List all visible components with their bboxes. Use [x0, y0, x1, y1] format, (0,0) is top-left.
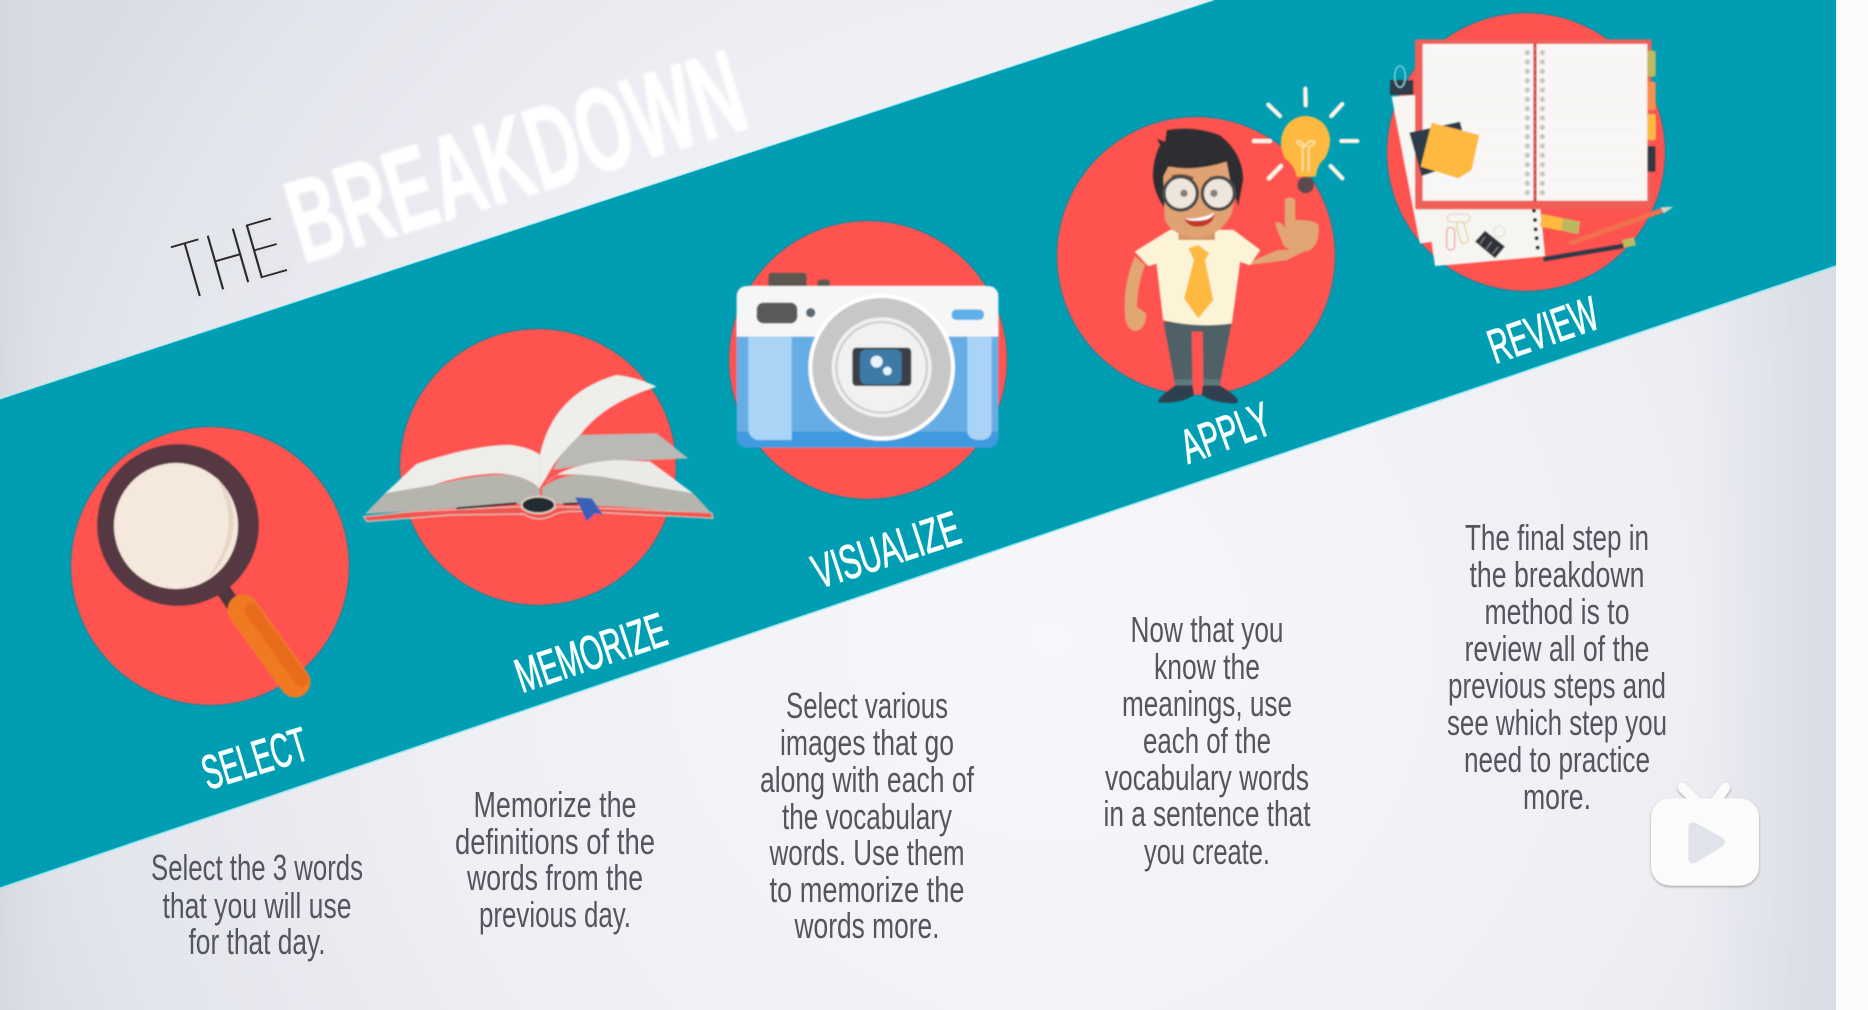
step description: review: previous steps and — [1448, 665, 1666, 706]
step description: apply: vocabulary words — [1105, 757, 1309, 798]
step: review — [1387, 13, 1673, 291]
step: visualize — [729, 221, 1007, 499]
step description: review: see which step you — [1447, 702, 1667, 743]
step description: visualize: to memorize the — [770, 869, 964, 910]
icon: video watermark logo — [1651, 788, 1759, 886]
step description: memorize: Memorize the — [474, 784, 636, 825]
step description: review: method is to — [1484, 591, 1630, 632]
step label: select: SELECT — [196, 718, 314, 801]
step description: visualize: Select various — [786, 685, 948, 726]
step description: review: the breakdown — [1470, 554, 1644, 595]
step label: apply: APPLY — [1174, 393, 1278, 474]
step: select — [71, 427, 349, 705]
step description: apply: know the — [1154, 646, 1260, 687]
step description: visualize — [760, 685, 975, 946]
step description: apply: meanings, use — [1122, 683, 1292, 724]
icon: man head and hand — [1153, 128, 1319, 252]
step description: review: The final step in — [1465, 517, 1649, 558]
step description: visualize: along with each of — [760, 759, 975, 800]
step description: select: Select the 3 words — [151, 847, 363, 888]
icon: open book — [363, 375, 713, 522]
step label: memorize: MEMORIZE — [509, 604, 673, 703]
title: THE — [162, 195, 297, 321]
step description: select — [151, 847, 363, 962]
step description: visualize: words more. — [794, 905, 940, 946]
step label: review: REVIEW — [1481, 287, 1606, 374]
step description: apply: you create. — [1144, 831, 1270, 872]
icon: light bulb — [1254, 89, 1357, 193]
step description: visualize: images that go — [780, 722, 954, 763]
step description: select: for that day. — [188, 921, 326, 962]
step description: visualize: words. Use them — [769, 832, 964, 873]
icon: man body — [1125, 230, 1307, 403]
step description: review: review all of the — [1464, 628, 1650, 669]
icon: camera — [737, 273, 998, 448]
step description: visualize: the vocabulary — [782, 796, 952, 837]
step description: apply: Now that you — [1130, 609, 1284, 650]
step description: apply — [1104, 609, 1310, 872]
step description: apply: each of the — [1143, 720, 1271, 761]
step description: apply: in a sentence that — [1104, 793, 1310, 834]
step description: memorize: words from the — [466, 857, 643, 898]
step: memorize — [363, 329, 713, 605]
step description: review: more. — [1523, 776, 1591, 817]
step description: select: that you will use — [162, 885, 352, 926]
step description: memorize: previous day. — [479, 894, 631, 935]
icon: notebook and stationery — [1390, 39, 1673, 266]
step label: visualize: VISUALIZE — [806, 502, 967, 599]
step description: memorize: definitions of the — [455, 821, 655, 862]
title — [162, 25, 760, 321]
step description: review: need to practice — [1464, 739, 1650, 780]
step: apply — [1057, 89, 1357, 403]
step description: review — [1447, 517, 1667, 817]
step description: memorize — [455, 784, 655, 935]
